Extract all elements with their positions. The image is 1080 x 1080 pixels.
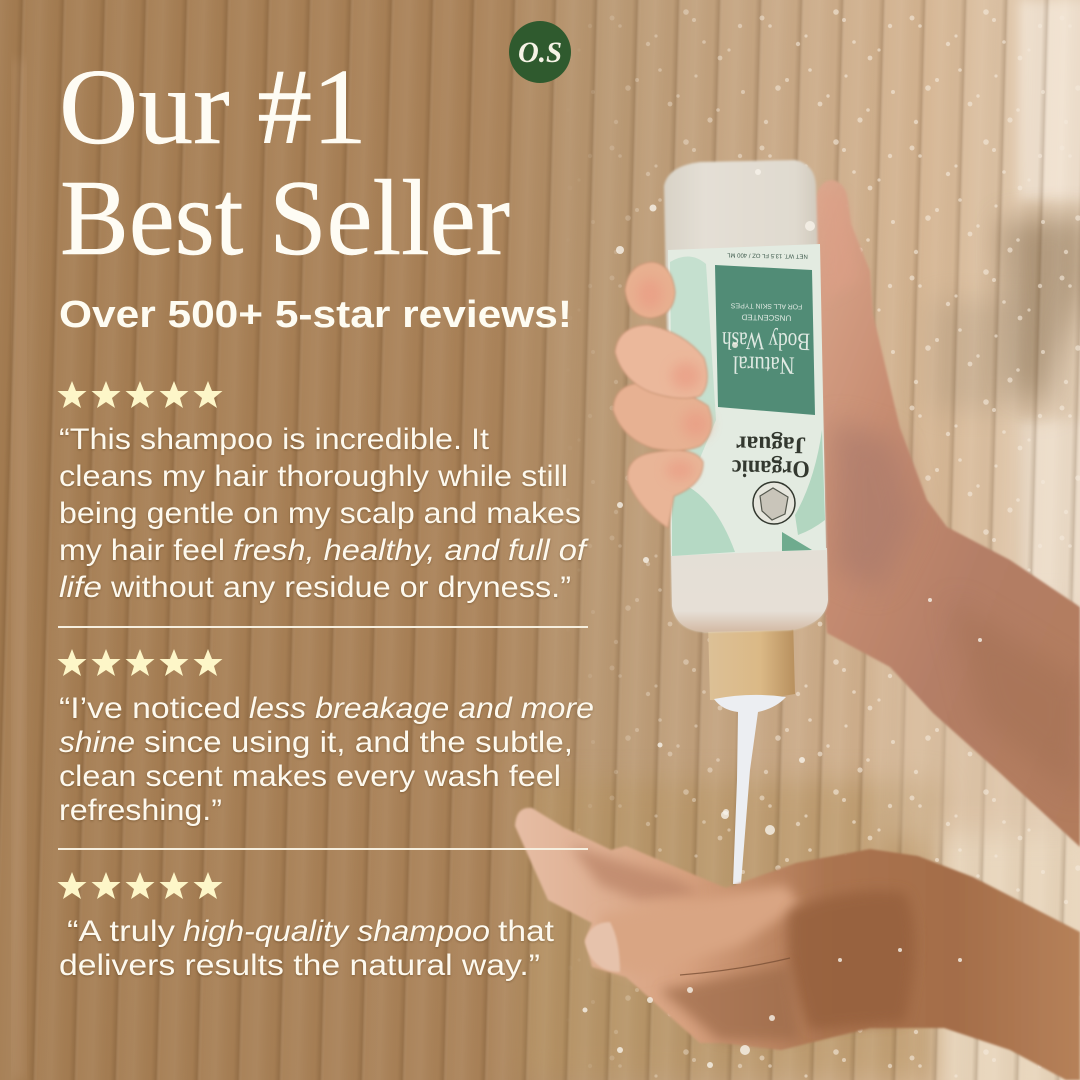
review 2 text: clean scent makes every wash feel [59,760,561,793]
divider 1 [58,626,588,628]
fingernail highlights [637,278,710,480]
review 2 text [59,692,594,827]
stars: review 1 [58,381,222,408]
review 3 text [59,915,555,982]
review 1 text: cleans my hair thoroughly while still [59,460,568,493]
label text: Natural Body Wash: FOR ALL SKIN TYPES [730,301,802,310]
review 3 text: “A truly [67,915,175,948]
review 2 text: since using it, and the subtle, [144,726,573,759]
review 2 text: shine [59,726,135,759]
panel: review 1 [58,381,589,604]
panel: review 3 [58,872,555,982]
wrist shadow [788,891,915,1030]
review 3 text: that [498,915,555,948]
stars: review 3 [58,872,222,899]
mint leaf label [668,244,826,556]
review 1 text: “This shampoo is incredible. It [59,423,490,456]
label text: Natural Body Wash: NET WT. 13.5 FL OZ / 400 ML [726,251,808,259]
stars: review 2 [58,649,222,676]
review 3 text: delivers results the natural way.” [59,949,540,982]
review 1 text [59,423,589,604]
review 1 text: being gentle on my scalp and makes [59,497,581,530]
water droplets falling [582,169,982,1068]
photo: shampoo stream [714,695,786,884]
bottle cap [708,618,795,700]
thumb [600,885,800,975]
subheading: Over 500+ 5-star reviews! [59,294,572,336]
palm interior shadow [570,845,700,900]
photo: lower cupped hand and forearm [515,808,1080,1080]
review 3 text: high-quality shampoo [183,915,490,948]
logo badge: O.S: O.S [518,36,562,69]
review 1 text: without any residue or dryness.” [110,571,571,604]
photo: shampoo bottle held upside down [664,160,828,700]
review 1 text: my hair feel [59,534,225,567]
green panel with product name [715,265,815,415]
title: Best Seller [60,159,510,278]
logo badge: O.S [509,21,571,83]
review 1 text: fresh, healthy, and full of [233,534,589,567]
brand name: Organic Jaguar: Jaguar [736,430,806,458]
title: Our #1 [59,48,367,167]
review 1 text: life [59,571,102,604]
label text: Natural Body Wash [721,251,812,379]
review 2 text: refreshing.” [59,794,222,827]
bottle body [664,160,828,632]
review 2 text: less breakage and more [249,692,594,725]
title [59,48,510,278]
water droplets behind the subject [560,0,1080,1080]
review 2 text: “I’ve noticed [59,692,241,725]
brand name: Organic Jaguar: Organic [731,454,810,482]
photo: upper hand and forearm [815,180,1080,847]
photo: gripping fingers [613,262,712,528]
divider 2 [58,848,588,850]
label text: Natural Body Wash: UNSCENTED [741,313,791,322]
panel: review 2 [58,649,594,827]
label text: Natural Body Wash: Body Wash [721,326,810,355]
jaguar emblem [753,482,795,524]
label text: Natural Body Wash: Natural [732,350,795,379]
brand name: Organic Jaguar [731,430,810,482]
